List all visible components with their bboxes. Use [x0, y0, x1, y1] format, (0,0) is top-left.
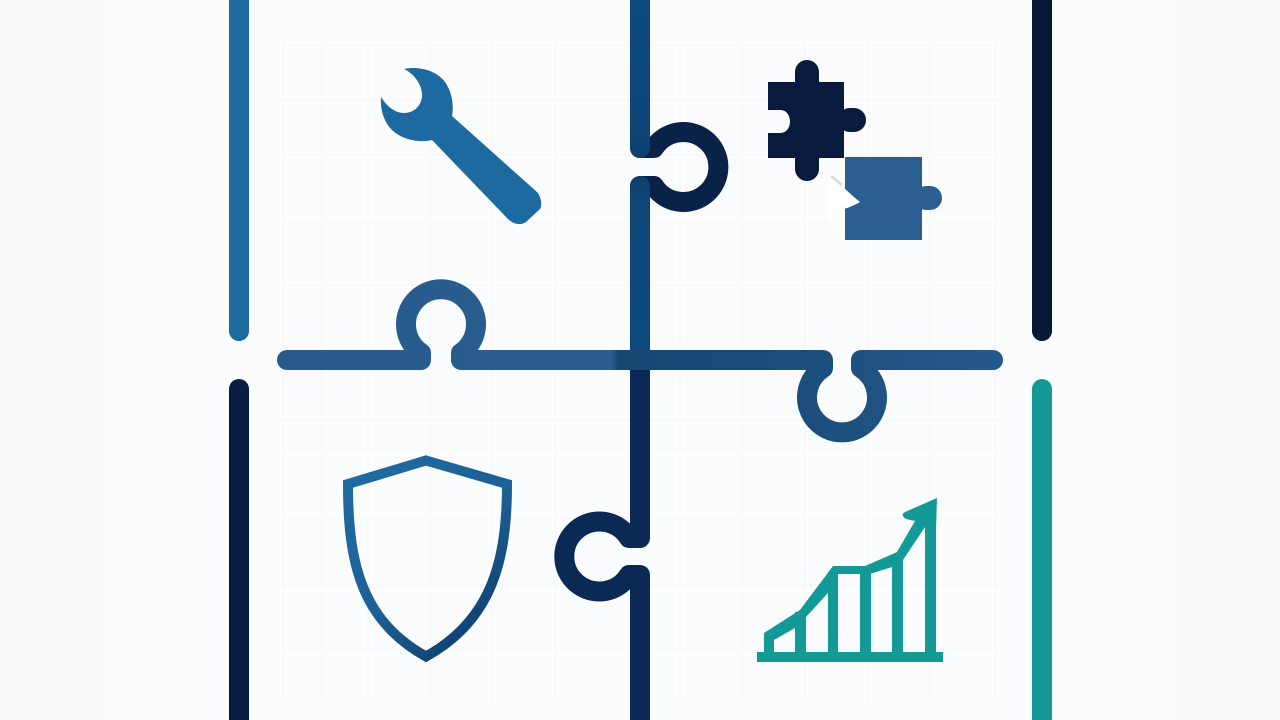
right edge upper bar [1032, 0, 1052, 331]
left edge lower bar [229, 389, 249, 720]
centre vertical connector, lower, with knob [564, 370, 640, 720]
baseline [757, 652, 943, 662]
notch shadow tick [831, 176, 842, 185]
icon: puzzle pieces [768, 60, 942, 240]
bars [764, 505, 936, 655]
white notch [826, 176, 860, 240]
icon: wrench [381, 68, 541, 224]
right edge lower bar [1032, 389, 1052, 720]
icon: shield [348, 460, 507, 656]
centre vertical connector, upper, with knob [640, 0, 718, 352]
faint grid [280, 40, 1000, 700]
trend line and arrowhead [764, 498, 937, 647]
centre horizontal connector with bumps [287, 289, 993, 432]
blue puzzle piece [845, 157, 942, 240]
icon: growth chart [757, 498, 943, 662]
dark puzzle piece [768, 60, 866, 181]
left edge upper bar [229, 0, 249, 331]
